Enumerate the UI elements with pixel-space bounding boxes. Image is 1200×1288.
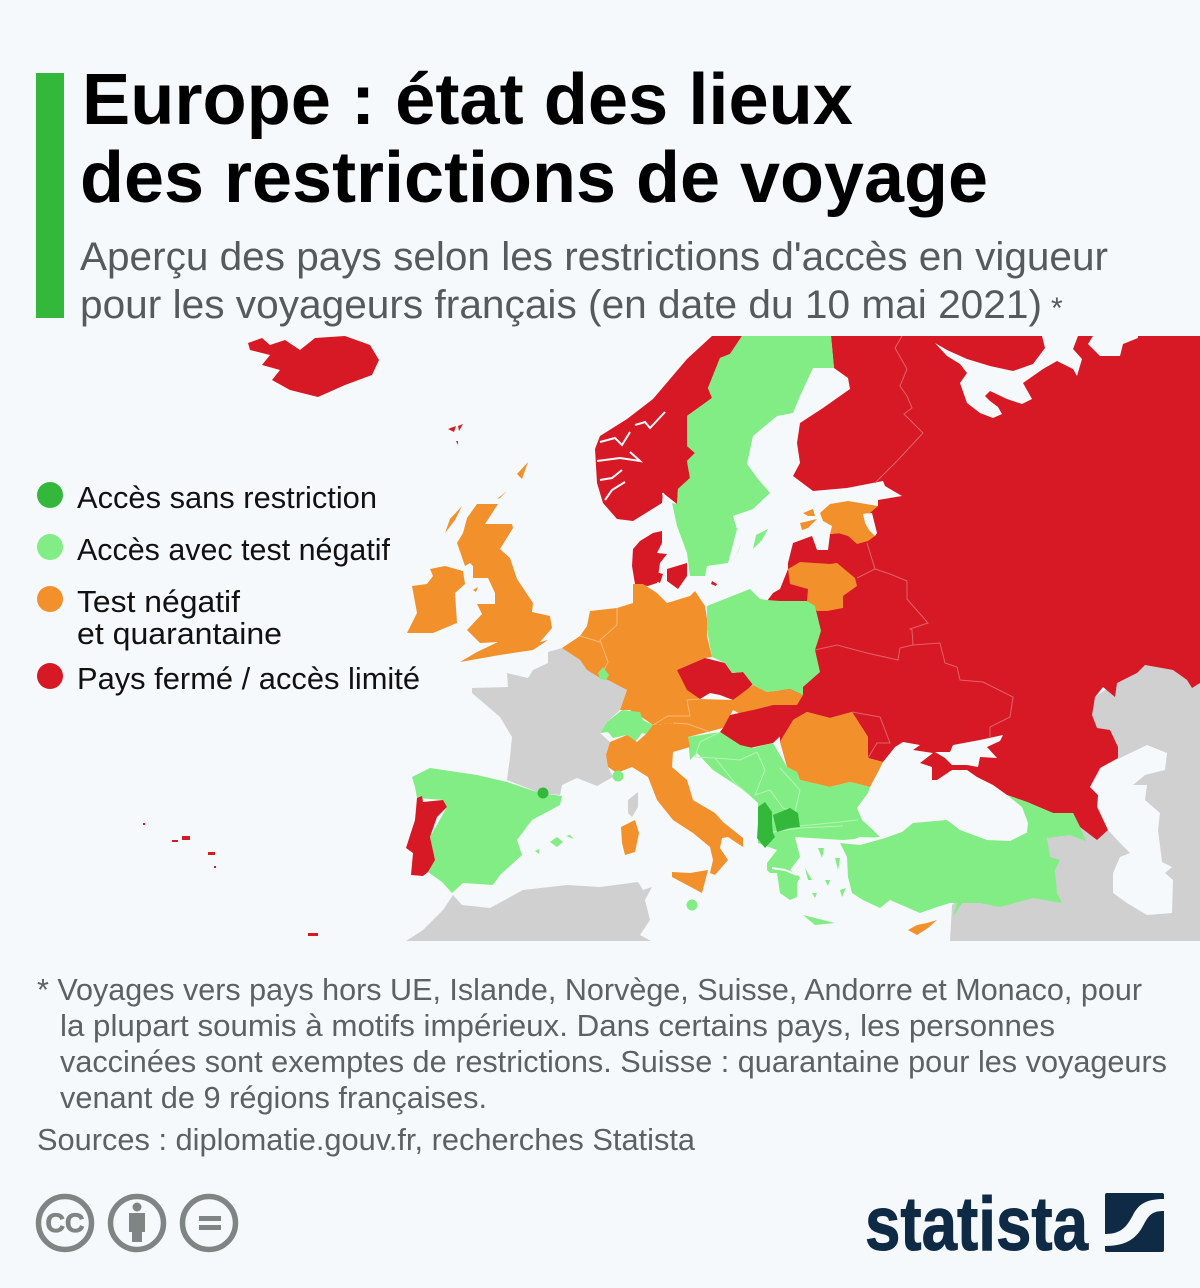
- legend item: closed: Pays fermé / accès limité: [77, 661, 420, 696]
- Statista logo mark: [1105, 1193, 1164, 1252]
- country: Lithuania: [788, 562, 857, 611]
- dot: Malta: [686, 900, 698, 910]
- legend item: test and quarantine: Test négatif: [77, 584, 240, 619]
- footnote: * Voyages vers pays hors UE, Islande, Norvège, Suisse, Andorre et Monaco, pour: [37, 972, 1142, 1007]
- legend item: test and quarantine: et quarantaine: [77, 616, 282, 651]
- gray: Middle East and Central Asia: [950, 665, 1200, 941]
- country: Denmark: [632, 531, 717, 589]
- Sea of Azov: [935, 735, 1003, 767]
- dot: Monaco: [612, 770, 624, 782]
- country: Portugal: [406, 796, 447, 876]
- country: Germany, Netherlands, Belgium, Austria: [562, 584, 733, 737]
- country: Italy: [606, 723, 743, 875]
- country: Georgia: [1007, 795, 1086, 841]
- footnote: venant de 9 régions françaises.: [60, 1080, 487, 1115]
- Faroe Islands: [448, 424, 463, 445]
- country: Romania: [780, 712, 883, 787]
- country: Slovakia: [733, 685, 803, 715]
- Oland: [732, 541, 742, 563]
- icon: attribution: [110, 1196, 164, 1250]
- Greek islands: [803, 848, 846, 925]
- non-covered gray: France: [472, 648, 627, 795]
- footnote: vaccinées sont exemptes de restrictions. Suisse : quarantaine pour les voyageurs: [60, 1044, 1167, 1079]
- title: des restrictions de voyage: [80, 138, 988, 218]
- country: United Kingdom: [445, 462, 552, 662]
- countries: Balkans, Bulgaria, Greece: [688, 732, 880, 900]
- country: Albania: [757, 802, 775, 848]
- Atlantic islands: [143, 823, 318, 936]
- Statista wordmark: statista: [865, 1182, 1089, 1267]
- Balkan borders: [695, 732, 858, 832]
- Caspian Sea: [1090, 745, 1173, 915]
- legend item: test and quarantine: [37, 584, 282, 651]
- country: Iceland: [248, 336, 379, 397]
- dot: Andorra: [538, 788, 548, 798]
- country: Poland: [707, 589, 821, 695]
- country: Spain: [412, 768, 562, 893]
- gray: North Africa: [406, 882, 652, 941]
- footnote: la plupart soumis à motifs impérieux. Dans certains pays, les personnes: [60, 1008, 1055, 1043]
- Sicily: [672, 870, 708, 893]
- subtitle: pour les voyageurs français (en date du 10 mai 2021): [80, 283, 1042, 327]
- country: Norway: [595, 336, 742, 521]
- subtitle: [80, 235, 1108, 327]
- country: Hungary: [720, 698, 805, 748]
- map of Europe: [143, 336, 1200, 941]
- Sardinia: [621, 820, 639, 855]
- subtitle: Aperçu des pays selon les restrictions d'accès en vigueur: [80, 235, 1108, 279]
- accent bar: [36, 73, 64, 318]
- footnote: [37, 972, 1167, 1115]
- country: Turkey: [840, 820, 1062, 917]
- title: [80, 60, 988, 218]
- country: Estonia: [800, 501, 878, 544]
- Balearic Islands: [535, 835, 574, 854]
- country: Ireland: [407, 566, 465, 633]
- legend: [37, 480, 420, 696]
- Sea of Marmara: [843, 837, 885, 844]
- Norwegian fjords: [597, 412, 665, 503]
- title: Europe : état des lieux: [82, 60, 853, 140]
- legend item: no restriction: Accès sans restriction: [77, 480, 377, 515]
- country: Sweden: [672, 336, 834, 576]
- gray: Corsica: [628, 792, 638, 817]
- sources: Sources : diplomatie.gouv.fr, recherches Statista: [37, 1122, 696, 1157]
- subtitle: *: [1051, 292, 1063, 325]
- Barents Sea inlet: [1088, 336, 1138, 356]
- country: North Macedonia: [773, 808, 800, 832]
- Gotland: [753, 529, 768, 549]
- red borders: [815, 336, 1013, 758]
- icon: creative commons: [38, 1196, 92, 1250]
- White Sea: [935, 336, 1082, 418]
- country: Switzerland: [600, 710, 653, 742]
- orange borders: [580, 608, 710, 732]
- icon: no derivatives: [182, 1196, 236, 1250]
- legend item: negative test: Accès avec test négatif: [77, 532, 390, 567]
- Lake Peipus: [863, 513, 877, 536]
- country: Czechia: [677, 658, 755, 700]
- Gulf of Corinth: [772, 868, 797, 875]
- country: Luxembourg: [598, 667, 609, 680]
- icon: creative commons: CC: [46, 1208, 84, 1238]
- country: Cyprus: [908, 920, 937, 935]
- country: Russia, Belarus, Ukraine, Finland, Latvia: [767, 336, 1200, 840]
